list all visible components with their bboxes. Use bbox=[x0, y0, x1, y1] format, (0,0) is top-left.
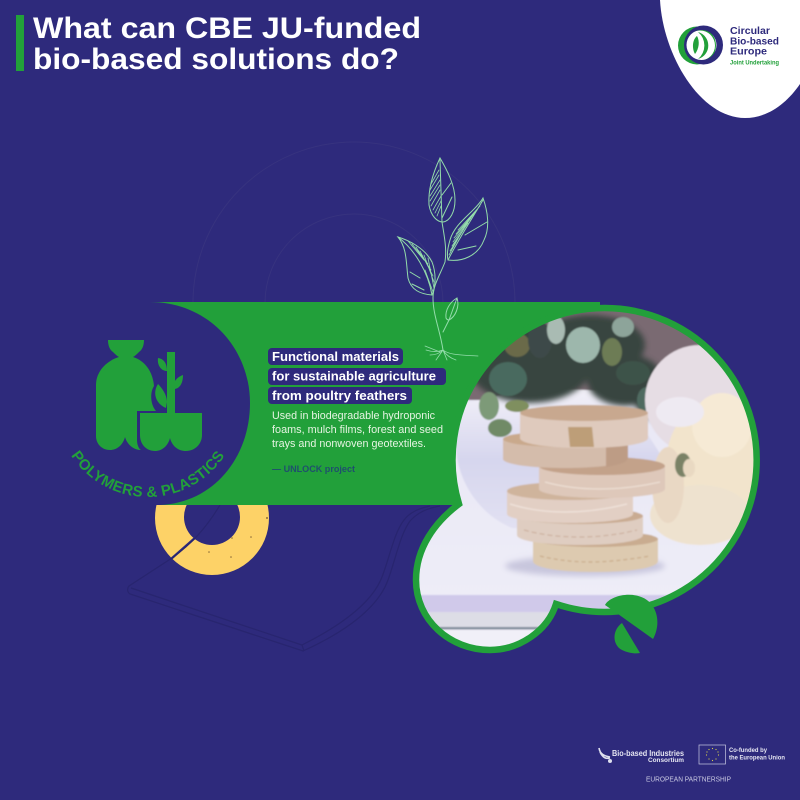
bio-based industries consortium logo: Bio-based Industries bbox=[612, 748, 684, 758]
disc 3 bbox=[539, 457, 665, 498]
logo wordmark: Circular bbox=[730, 25, 770, 37]
pot with scallops bbox=[140, 413, 202, 451]
line-art sheet bbox=[128, 505, 440, 651]
co-funded text: Co-funded by bbox=[729, 747, 767, 754]
disc 4 bbox=[507, 482, 633, 523]
photo background bbox=[468, 311, 700, 401]
body text: foams, mulch films, forest and seed bbox=[272, 424, 443, 436]
category label text: POLYMERS & PLASTICS bbox=[72, 450, 224, 498]
dark foliage mass bbox=[468, 315, 677, 419]
logo wordmark: Europe bbox=[730, 46, 767, 58]
yellow donut bbox=[155, 505, 269, 575]
leaves bbox=[155, 358, 183, 408]
logo mark bbox=[678, 26, 723, 64]
disc 2 bbox=[503, 431, 628, 468]
european partnership: EUROPEAN PARTNERSHIP bbox=[646, 776, 731, 784]
disc 6 bbox=[533, 531, 658, 572]
left leaf bbox=[398, 237, 435, 295]
title block bbox=[16, 12, 421, 76]
footer logos bbox=[599, 745, 785, 784]
white vase bbox=[456, 390, 664, 530]
title accent bar bbox=[16, 15, 24, 71]
small leaf bbox=[443, 298, 458, 332]
plant line illustration bbox=[398, 158, 488, 360]
disc 1 bbox=[520, 405, 648, 448]
table bands bbox=[421, 594, 668, 630]
body text: trays and nonwoven geotextiles. bbox=[272, 438, 426, 450]
category label on arc bbox=[56, 405, 240, 497]
bio-based industries consortium logo: Consortium bbox=[648, 757, 685, 764]
right leaf bbox=[447, 198, 488, 260]
polymers and plastics icon bbox=[96, 340, 202, 451]
logo panel bbox=[660, 0, 800, 118]
headline line 1: Functional materials bbox=[272, 350, 399, 364]
stem bbox=[167, 352, 175, 414]
photo frame outline bbox=[416, 308, 757, 650]
stem bbox=[433, 222, 446, 350]
EU flag outline bbox=[699, 745, 726, 764]
logo wordmark: Bio-based bbox=[730, 36, 779, 48]
project credit: — UNLOCK project bbox=[272, 464, 356, 475]
headline line 2: for sustainable agriculture bbox=[272, 370, 436, 384]
green banner bbox=[150, 302, 600, 505]
body text: Used in biodegradable hydroponic bbox=[272, 410, 436, 422]
decorative concentric arcs bbox=[193, 142, 515, 303]
bag bbox=[96, 340, 156, 450]
headline highlights bbox=[268, 348, 446, 404]
roots bbox=[425, 346, 478, 360]
title text: bio-based solutions do? bbox=[33, 43, 399, 76]
disc 5 bbox=[517, 508, 643, 545]
title text: What can CBE JU-funded bbox=[33, 12, 421, 45]
co-funded text: the European Union bbox=[729, 754, 785, 762]
top leaf bbox=[429, 158, 455, 222]
logo tagline: Joint Undertaking bbox=[730, 60, 779, 66]
cream flowers bbox=[645, 345, 758, 545]
sprout emblem under the photo bbox=[605, 595, 657, 653]
headline line 3: from poultry feathers bbox=[272, 389, 407, 403]
bio-based industries consortium logo bbox=[599, 748, 685, 764]
foliage bbox=[478, 316, 650, 438]
photo: stacked feather-based discs bbox=[419, 311, 754, 647]
disc shadow bbox=[505, 556, 665, 576]
